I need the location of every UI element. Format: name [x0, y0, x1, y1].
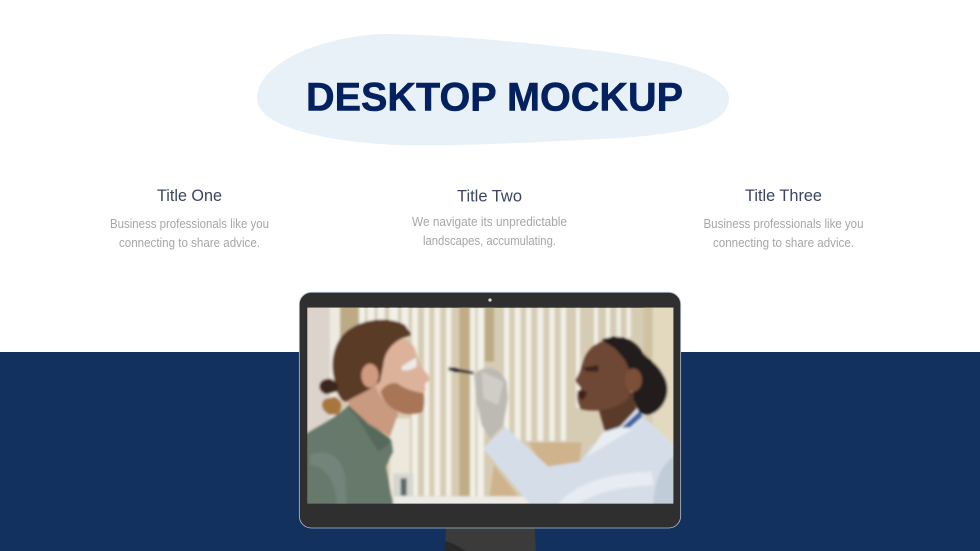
- collar: [587, 409, 644, 457]
- hair bun: [319, 379, 338, 394]
- stethoscope strap: [622, 411, 643, 428]
- monitor stand: [445, 528, 536, 551]
- body text: title three: Business professionals like you: [704, 216, 864, 231]
- wall and blinds: [303, 305, 676, 506]
- title blob: [257, 34, 729, 145]
- ear: [625, 368, 642, 392]
- ponytail: [322, 397, 341, 415]
- column: title one: [110, 186, 269, 250]
- coat: [483, 416, 674, 504]
- screen photo: doctor examining patient: [303, 305, 677, 508]
- body text: title two: landscapes, accumulating.: [423, 233, 556, 248]
- cardboard box: [489, 442, 582, 498]
- face: [576, 341, 633, 411]
- patient: [303, 320, 429, 508]
- heading: title two: Title Two: [457, 186, 522, 206]
- shirt: [303, 404, 394, 508]
- ear: [361, 364, 379, 388]
- neck: [598, 392, 637, 432]
- body text: title two: [412, 214, 567, 248]
- neck: [347, 385, 398, 437]
- title: DESKTOP MOCKUP: [306, 76, 683, 120]
- hair: [332, 320, 412, 402]
- column: title two: [412, 186, 567, 248]
- body text: title one: connecting to share advice.: [119, 235, 260, 250]
- navy background band: [0, 352, 980, 551]
- glasses glare: [402, 358, 417, 370]
- desktop monitor mockup: [299, 292, 681, 551]
- body text: title two: We navigate its unpredictable: [412, 214, 567, 229]
- monitor body: [299, 292, 681, 528]
- glove: [474, 368, 508, 439]
- column: title three: [704, 186, 864, 250]
- doctor: [449, 337, 677, 508]
- beard: [381, 383, 424, 414]
- heading: title three: Title Three: [745, 186, 822, 205]
- body text: title one: [110, 216, 269, 250]
- webcam: [488, 298, 492, 302]
- desk: [393, 496, 533, 506]
- hair: [602, 337, 667, 414]
- penlight: [449, 367, 474, 374]
- body text: title three: [704, 216, 864, 250]
- mouth and eye: [577, 390, 587, 400]
- body text: title one: Business professionals like you: [110, 216, 269, 231]
- body text: title three: connecting to share advice.: [713, 235, 854, 250]
- face: [375, 336, 430, 400]
- heading: title one: Title One: [157, 186, 222, 205]
